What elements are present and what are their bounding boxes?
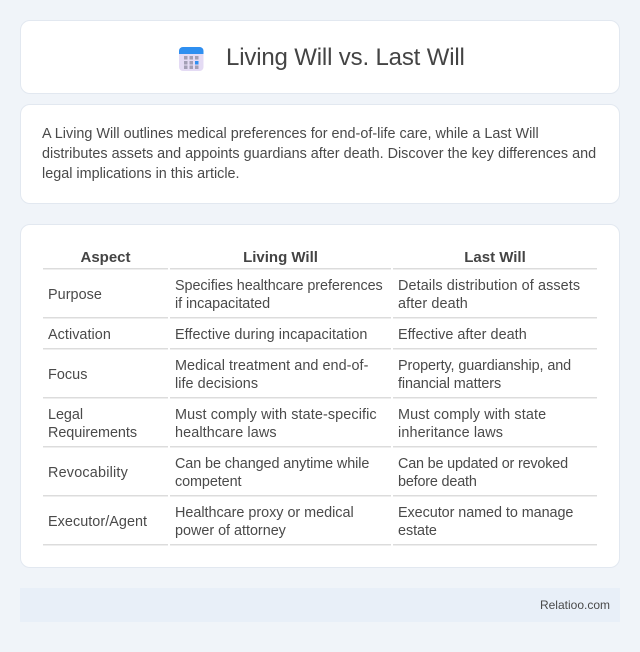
executor: living will xyxy=(175,505,354,539)
focus: last will: Property, guardianship, and xyxy=(398,358,571,374)
row: purpose: Purpose xyxy=(48,287,102,303)
row: legal requirements: Requirements xyxy=(48,425,137,441)
purpose: living will xyxy=(175,278,383,312)
revocability: last will xyxy=(398,456,568,490)
focus: living will xyxy=(175,358,368,392)
footer bar xyxy=(20,588,620,622)
legal: living will: Must comply with state-specific xyxy=(175,407,377,423)
executor: living will: power of attorney xyxy=(175,523,286,539)
row: legal requirements: Legal xyxy=(48,407,83,423)
revocability: living will: Can be changed anytime while xyxy=(175,456,369,472)
executor: last will: Executor named to manage xyxy=(398,505,573,521)
legal: last will: inheritance laws xyxy=(398,425,503,441)
intro text xyxy=(42,126,596,182)
revocability: last will: before death xyxy=(398,474,477,490)
revocability: living will: competent xyxy=(175,474,241,490)
table header: aspect: Aspect xyxy=(80,249,131,266)
purpose: last will: Details distribution of assets xyxy=(398,278,580,294)
header panel xyxy=(20,20,620,94)
purpose: living will: if incapacitated xyxy=(175,296,270,312)
focus: last will xyxy=(398,358,571,392)
row: revocability: Revocability xyxy=(48,465,128,481)
activation: living will: Effective during incapacitation xyxy=(175,327,367,343)
executor: last will: estate xyxy=(398,523,437,539)
title: Living Will vs. Last Will xyxy=(226,44,465,71)
purpose: last will: after death xyxy=(398,296,468,312)
activation: last will: Effective after death xyxy=(398,327,527,343)
legal: living will xyxy=(175,407,377,441)
row: legal requirements xyxy=(48,407,137,441)
comparison table panel xyxy=(20,224,620,568)
focus: last will: financial matters xyxy=(398,376,501,392)
executor: last will xyxy=(398,505,573,539)
legal: last will: Must comply with state xyxy=(398,407,546,423)
legal: living will: healthcare laws xyxy=(175,425,277,441)
table header: living will: Living Will xyxy=(243,249,318,266)
revocability: last will: Can be updated or revoked xyxy=(398,456,568,472)
purpose: last will xyxy=(398,278,580,312)
intro text: legal implications in this article. xyxy=(42,166,240,182)
table header: last will: Last Will xyxy=(464,249,526,266)
revocability: living will xyxy=(175,456,369,490)
intro panel xyxy=(20,104,620,204)
focus: living will: Medical treatment and end-of- xyxy=(175,358,368,374)
intro text: distributes assets and appoints guardians after death. Discover the key differences and xyxy=(42,146,596,162)
row: focus: Focus xyxy=(48,367,87,383)
purpose: living will: Specifies healthcare preferences xyxy=(175,278,383,294)
row: activation: Activation xyxy=(48,327,111,343)
footer credit: Relatioo.com xyxy=(540,598,610,612)
focus: living will: life decisions xyxy=(175,376,258,392)
icon: calendar xyxy=(179,47,204,71)
executor: living will: Healthcare proxy or medical xyxy=(175,505,354,521)
legal: last will xyxy=(398,407,546,441)
intro text: A Living Will outlines medical preferences for end-of-life care, while a Last Will xyxy=(42,126,539,142)
row: executor/agent: Executor/Agent xyxy=(48,514,147,530)
